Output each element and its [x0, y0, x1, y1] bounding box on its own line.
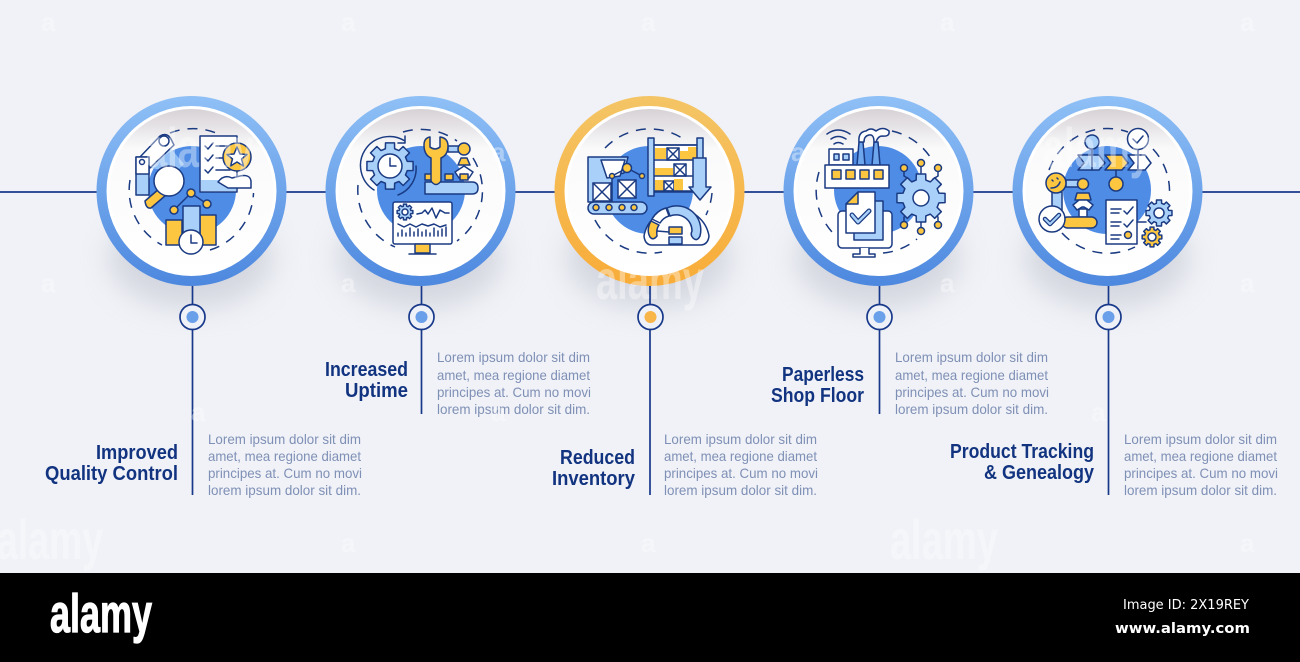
step 5: product tracking and genealogy	[1012, 96, 1202, 286]
stock watermarks: a	[641, 528, 656, 558]
timeline horizontal line	[0, 191, 1300, 193]
text: description 5: lorem ipsum dolor sit dim.	[1124, 482, 1277, 498]
text: description 2: lorem ipsum dolor sit dim.	[437, 401, 590, 417]
heading: reduced inventory: Reduced	[560, 447, 635, 469]
text: description 2: Lorem ipsum dolor sit dim	[437, 349, 590, 365]
text: description 2: principes at. Cum no movi	[437, 384, 591, 400]
heading: paperless shop floor	[771, 364, 864, 407]
stock watermarks: a	[1240, 268, 1255, 298]
step 3: reduced inventory	[554, 96, 744, 286]
text: description 4: principes at. Cum no movi	[895, 384, 1049, 400]
text: description 1: amet, mea regione diamet	[208, 448, 361, 464]
step 1: improved quality control	[96, 96, 286, 286]
stock watermarks: alamy	[890, 508, 998, 571]
stock watermarks: a	[191, 397, 206, 427]
heading: improved quality control	[45, 442, 178, 485]
stock watermarks: a	[41, 268, 56, 298]
text: description 1: Lorem ipsum dolor sit dim	[208, 431, 361, 447]
heading: paperless shop floor: Paperless	[782, 364, 864, 386]
heading: increased uptime: Uptime	[345, 380, 408, 402]
text: description 3: principes at. Cum no movi	[664, 465, 818, 481]
step 4: paperless shop floor	[784, 96, 974, 286]
icon: uptime	[358, 129, 482, 254]
stock watermarks: alamy	[1043, 116, 1151, 179]
text: description 5: Lorem ipsum dolor sit dim	[1124, 431, 1277, 447]
footer bar	[0, 573, 1300, 662]
text: description 3: amet, mea regione diamet	[664, 448, 817, 464]
text: description 1: lorem ipsum dolor sit dim.	[208, 482, 361, 498]
heading: paperless shop floor: Shop Floor	[771, 385, 864, 407]
icon: inventory	[588, 129, 712, 253]
heading: reduced inventory: Inventory	[552, 468, 636, 490]
heading: product tracking and genealogy: Product Tracking	[950, 441, 1094, 463]
stock watermarks: a	[940, 7, 955, 37]
text: description 3: lorem ipsum dolor sit dim.	[664, 482, 817, 498]
text: description 4: lorem ipsum dolor sit dim.	[895, 401, 1048, 417]
stock watermarks: a	[341, 7, 356, 37]
footer logo: alamy	[50, 584, 152, 644]
stock watermarks: alamy	[596, 248, 704, 311]
ring 2	[326, 96, 516, 286]
text: description 3	[664, 431, 818, 498]
step 2: increased uptime	[326, 96, 516, 286]
stock watermarks: a	[641, 7, 656, 37]
text: description 4: amet, mea regione diamet	[895, 367, 1048, 383]
text: description 2	[437, 349, 591, 417]
heading: increased uptime	[325, 359, 408, 402]
heading: product tracking and genealogy: & Genealogy	[984, 462, 1095, 484]
stock watermarks: a	[341, 268, 356, 298]
connector stems	[192, 286, 1108, 495]
heading: increased uptime: Increased	[325, 359, 408, 381]
icon: paperless factory	[816, 128, 945, 257]
stock watermarks: a	[791, 137, 806, 167]
text: description 4	[895, 349, 1049, 417]
ring 3	[554, 96, 744, 286]
stock watermarks: a	[1091, 397, 1106, 427]
text: description 2: amet, mea regione diamet	[437, 367, 590, 383]
ring 4	[784, 96, 974, 286]
stock watermarks: a	[940, 268, 955, 298]
stock watermarks: a	[491, 397, 506, 427]
stock watermarks: a	[341, 528, 356, 558]
heading: product tracking and genealogy	[950, 441, 1095, 484]
ring 1	[96, 96, 286, 286]
circle shadows	[109, 208, 1189, 308]
timeline nodes	[180, 304, 1121, 330]
heading: reduced inventory	[552, 447, 636, 490]
stock watermarks: a	[1240, 7, 1255, 37]
text: description 4: Lorem ipsum dolor sit dim	[895, 349, 1048, 365]
stock watermarks: a	[491, 137, 506, 167]
stock watermarks: alamy	[0, 508, 103, 571]
stock watermarks: alamy	[146, 116, 254, 179]
text: description 5: amet, mea regione diamet	[1124, 448, 1277, 464]
footer image id: Image ID: 2X19REY	[1123, 597, 1250, 613]
stock watermarks: a	[41, 7, 56, 37]
text: description 1	[208, 431, 362, 498]
stock watermarks: a	[1240, 528, 1255, 558]
footer website: www.alamy.com	[1115, 621, 1250, 637]
icon: quality control	[129, 129, 254, 254]
ring 5	[1012, 96, 1202, 286]
text: description 5: principes at. Cum no movi	[1124, 465, 1278, 481]
text: description 1: principes at. Cum no movi	[208, 465, 362, 481]
text: description 3: Lorem ipsum dolor sit dim	[664, 431, 817, 447]
heading: improved quality control: Improved	[96, 442, 178, 464]
text: description 5	[1124, 431, 1278, 498]
heading: improved quality control: Quality Control	[45, 463, 178, 485]
icon: tracking	[1039, 128, 1172, 253]
